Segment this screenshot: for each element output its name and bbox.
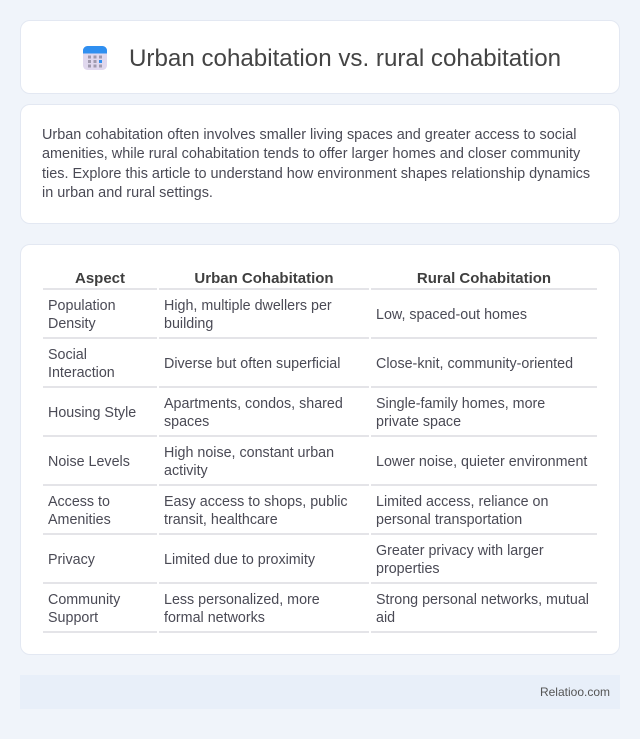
text: formal networks	[164, 610, 265, 626]
text: Easy access to shops, public	[164, 494, 348, 510]
intro text	[42, 127, 590, 201]
row: population density: Population	[48, 298, 116, 314]
text: properties	[376, 561, 440, 577]
text: Less personalized, more	[164, 592, 320, 608]
text: Greater privacy with larger	[376, 543, 544, 559]
row: access to amenities: Access to	[48, 494, 110, 510]
column header: urban: Urban Cohabitation	[194, 270, 334, 287]
text: High, multiple dwellers per	[164, 298, 332, 314]
row: social interaction: Interaction	[48, 365, 115, 381]
footer text: Relatioo.com	[540, 685, 610, 699]
row: population density: Density	[48, 316, 96, 332]
row: community support: Community	[48, 592, 120, 608]
intro text: ties. Explore this article to understand how environment shapes relationship dynamics	[42, 166, 590, 182]
intro text: Urban cohabitation often involves smaller living spaces and greater access to social	[42, 127, 576, 143]
row: social interaction	[48, 347, 115, 381]
text: building	[164, 316, 213, 332]
intro text: amenities, while rural cohabitation tends to offer larger homes and closer community	[42, 146, 580, 162]
icon: calendar	[83, 46, 107, 70]
text: Diverse but often superficial	[164, 356, 340, 372]
text: Limited due to proximity	[164, 552, 315, 568]
text: Lower noise, quieter environment	[376, 454, 587, 470]
text: Apartments, condos, shared	[164, 396, 343, 412]
row: community support	[48, 592, 120, 626]
footer bar	[20, 675, 620, 709]
text: private space	[376, 414, 461, 430]
row: noise levels: Noise Levels	[48, 454, 130, 470]
row: access to amenities: Amenities	[48, 512, 111, 528]
intro text: in urban and rural settings.	[42, 185, 213, 201]
table	[43, 270, 597, 633]
header card	[20, 20, 620, 94]
row: privacy: Privacy	[48, 552, 95, 568]
text: Close-knit, community-oriented	[376, 356, 573, 372]
row: population density	[48, 298, 116, 332]
text: activity	[164, 463, 208, 479]
text: High noise, constant urban	[164, 445, 334, 461]
intro card	[20, 104, 620, 224]
text: spaces	[164, 414, 209, 430]
column header: aspect: Aspect	[75, 270, 125, 287]
text: Single-family homes, more	[376, 396, 545, 412]
row: access to amenities	[48, 494, 111, 528]
column header: rural: Rural Cohabitation	[417, 270, 551, 287]
text: transit, healthcare	[164, 512, 278, 528]
text: Low, spaced-out homes	[376, 307, 527, 323]
title: Urban cohabitation vs. rural cohabitation	[129, 45, 561, 72]
row: housing style: Housing Style	[48, 405, 136, 421]
text: Limited access, reliance on	[376, 494, 548, 510]
text: aid	[376, 610, 395, 626]
row: community support: Support	[48, 610, 98, 626]
table card	[20, 244, 620, 655]
text: personal transportation	[376, 512, 522, 528]
text: Strong personal networks, mutual	[376, 592, 589, 608]
row: social interaction: Social	[48, 347, 87, 363]
